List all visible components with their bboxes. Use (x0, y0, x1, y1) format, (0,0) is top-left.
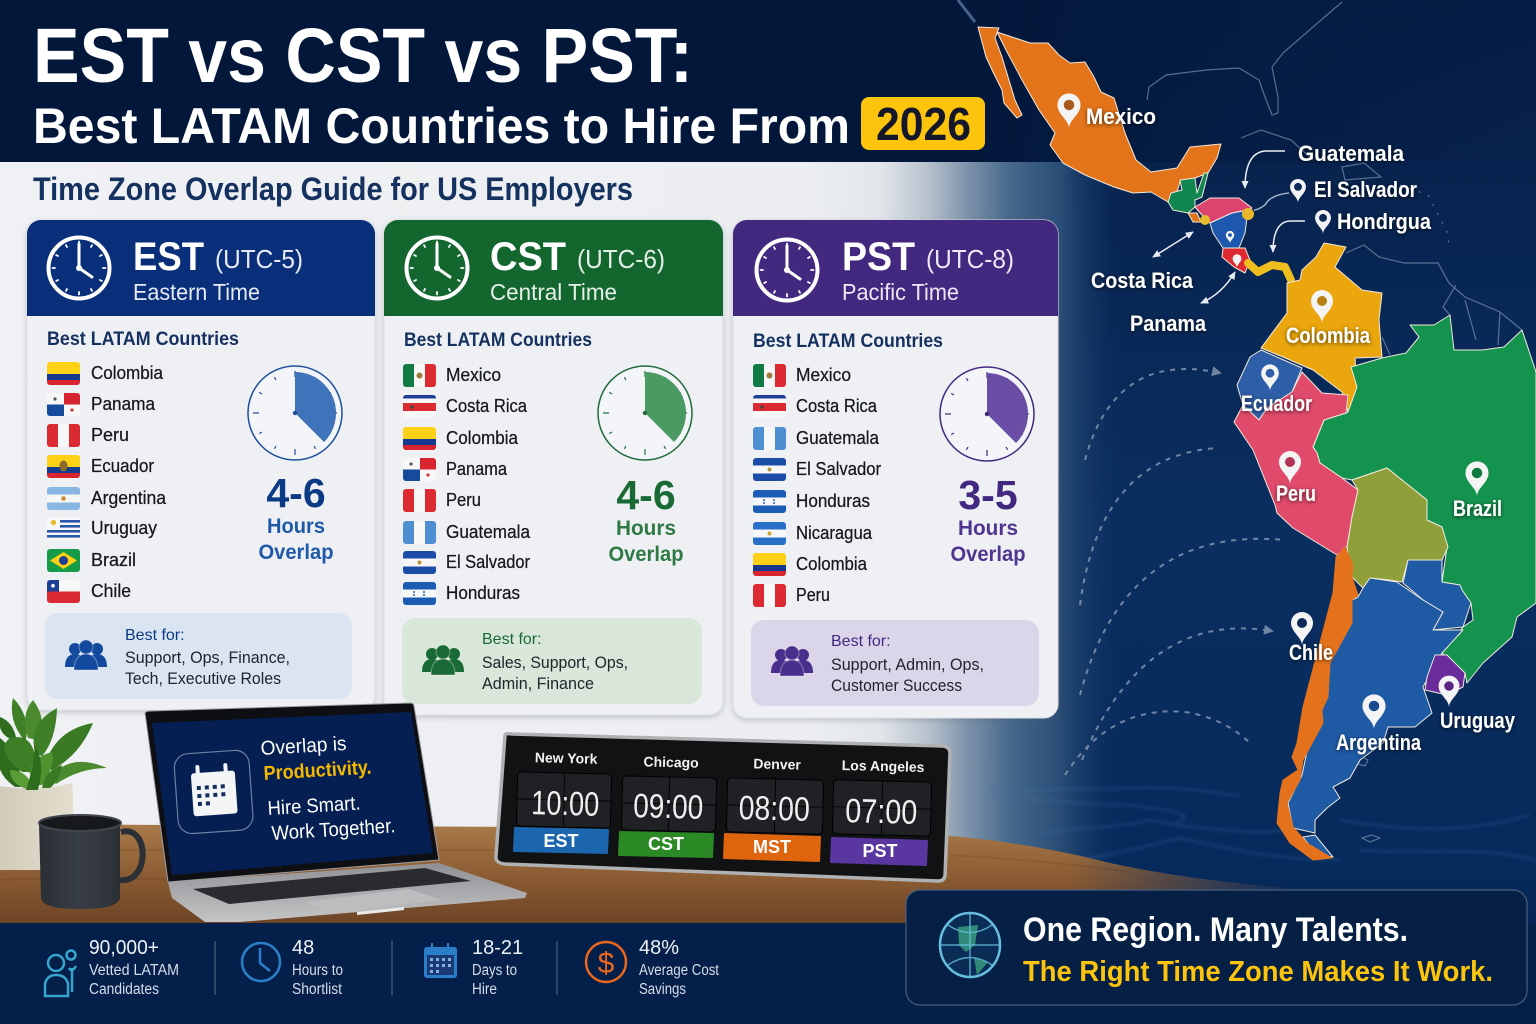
CST countries: Guatemala (446, 522, 531, 542)
EST list heading: Best LATAM Countries (47, 328, 239, 350)
country: Peru (1234, 372, 1358, 555)
PST best for (751, 620, 1039, 706)
stat: savings: Average Cost (639, 962, 720, 979)
EST overlap value (258, 470, 334, 564)
pin: Brazil (1465, 461, 1489, 496)
panel: CST (384, 220, 723, 715)
clock: Chicago: Chicago (643, 753, 699, 771)
CST overlap dial (598, 366, 692, 460)
PST countries: Nicaragua (796, 523, 873, 543)
map labels: Brazil (1453, 496, 1502, 521)
top header band (0, 0, 1536, 162)
stat: days: Hire (472, 981, 497, 998)
country: Nicaragua (1210, 210, 1248, 248)
EST header: (UTC-5) (215, 244, 303, 274)
coastlines (958, 0, 1522, 842)
pin: Nicaragua (1226, 231, 1234, 243)
PST overlap dial (940, 367, 1034, 461)
map labels: Guatemala (1298, 141, 1405, 166)
stat: candidates: Candidates (89, 981, 159, 998)
CST countries: Honduras (446, 583, 520, 603)
EST countries (47, 362, 167, 603)
PST header (733, 220, 1058, 316)
PST overlap value (950, 472, 1026, 566)
icon: calendar (424, 943, 457, 978)
country: El Salvador (1188, 213, 1201, 222)
country: Ecuador (1237, 350, 1302, 420)
dashed arcs (1065, 369, 1285, 775)
CST countries (403, 364, 531, 605)
PST countries: Costa Rica (796, 396, 878, 416)
PST overlap value: 3-5 (958, 472, 1018, 518)
PST countries: Mexico (796, 365, 851, 385)
CST countries: Panama (446, 459, 508, 479)
PST header: PST (842, 235, 915, 279)
map arrows (1153, 151, 1305, 303)
EST countries: Argentina (91, 488, 167, 508)
title: EST vs CST vs PST: (33, 13, 693, 99)
small map details (1200, 208, 1254, 225)
PST countries: Honduras (796, 491, 870, 511)
clock: Denver (724, 755, 824, 861)
map labels: Uruguay (1440, 708, 1516, 733)
clock: Los Angeles (831, 757, 932, 865)
CST countries: Peru (446, 490, 481, 510)
EST header: EST (133, 235, 204, 279)
clock: New York: 10:00 (531, 784, 600, 824)
EST best for (45, 613, 352, 699)
PST best for: Best for: (831, 633, 891, 650)
country: Paraguay (1403, 560, 1471, 630)
pin: El Salvador (1290, 179, 1306, 203)
stat: hours (242, 937, 343, 998)
CST header: CST (490, 235, 566, 279)
EST header (27, 220, 375, 316)
PST best for: Customer Success (831, 677, 962, 695)
pin: Mexico (1057, 93, 1081, 128)
map pins (1057, 93, 1489, 729)
stat: candidates: Vetted LATAM (89, 962, 179, 979)
country: Honduras (1195, 198, 1252, 223)
country: Uruguay (1425, 655, 1465, 695)
screen text: Overlap is (260, 733, 347, 760)
pin: Honduras (1315, 210, 1331, 234)
EST overlap value: Overlap (258, 541, 334, 564)
PST overlap value: Hours (958, 517, 1018, 540)
clock: Los Angeles: PST (862, 841, 898, 861)
CST best for: Admin, Finance (482, 675, 594, 693)
stat: savings: Savings (639, 981, 686, 998)
country: Bolivia (1347, 468, 1448, 588)
CST overlap value (608, 472, 684, 566)
stat: hours: 48 (292, 937, 314, 959)
laptop screen frame (145, 703, 439, 882)
map labels: Colombia (1286, 323, 1371, 348)
CST overlap value: Hours (616, 517, 676, 540)
light panel area (0, 162, 1120, 880)
stat: savings: 48% (639, 937, 679, 959)
EST countries: Peru (91, 425, 129, 445)
map labels: Peru (1276, 481, 1316, 506)
icon: clock (242, 943, 280, 981)
EST countries: Chile (91, 581, 131, 601)
clock: Chicago: CST (648, 834, 684, 854)
clock: New York: New York (535, 749, 598, 767)
EST countries: Panama (91, 394, 156, 414)
world clock device (496, 734, 950, 881)
icon: globe (940, 913, 1000, 977)
stat: days (424, 937, 523, 998)
panel: PST (733, 220, 1058, 718)
EST countries: Brazil (91, 550, 136, 570)
CST header: (UTC-6) (577, 244, 665, 274)
EST header: Eastern Time (133, 279, 260, 305)
EST overlap value: 4-6 (266, 470, 326, 516)
call-out box: The Right Time Zone Makes It Work. (1023, 956, 1493, 988)
clock: New York (514, 749, 612, 853)
map labels: Panama (1130, 311, 1207, 336)
PST countries: El Salvador (796, 459, 881, 479)
CST best for: Best for: (482, 631, 542, 648)
country: Panama (1248, 263, 1291, 280)
map labels: Hondrgua (1337, 209, 1432, 234)
bottom stats bar (0, 923, 1536, 1024)
desk surface (0, 824, 1285, 923)
pin: Peru (1279, 451, 1301, 484)
pin: Ecuador (1261, 364, 1279, 391)
CST header: Central Time (490, 279, 617, 305)
stat: candidates: 90,000+ (89, 937, 159, 959)
pin: Costa Rica (1233, 254, 1241, 267)
CST overlap value: Overlap (608, 543, 684, 566)
CST list heading: Best LATAM Countries (404, 329, 592, 351)
stat: days: 18-21 (472, 937, 523, 959)
map labels (1086, 104, 1516, 755)
EST countries: Colombia (91, 363, 164, 383)
call-out box: One Region. Many Talents. (1023, 911, 1408, 949)
map labels: El Salvador (1314, 177, 1417, 202)
country: Costa Rica (1222, 248, 1250, 273)
CST countries: El Salvador (446, 552, 530, 572)
keyboard (193, 868, 471, 904)
icon: people (45, 950, 76, 996)
laptop screen (152, 712, 433, 875)
leaves (0, 698, 107, 790)
clock: Denver: 08:00 (738, 789, 810, 829)
PST best for: Support, Admin, Ops, (831, 656, 984, 674)
PST countries: Peru (796, 585, 830, 605)
map: Latin America (978, 27, 1536, 860)
map labels: Argentina (1336, 730, 1422, 755)
ocean wave texture (985, 787, 1536, 862)
map labels: Costa Rica (1091, 268, 1194, 293)
EST overlap value: Hours (267, 515, 325, 538)
clock: Denver: MST (753, 837, 791, 857)
country: Brazil (1313, 315, 1536, 683)
PST list heading: Best LATAM Countries (753, 330, 943, 352)
map labels: Chile (1289, 640, 1333, 665)
screen text (260, 733, 396, 845)
CST header (384, 220, 723, 316)
panel: EST (27, 220, 375, 710)
PST countries (753, 364, 881, 607)
plant (0, 698, 107, 870)
EST best for: Tech, Executive Roles (125, 670, 281, 688)
clock: Los Angeles: 07:00 (845, 792, 918, 832)
EST best for: Support, Ops, Finance, (125, 649, 290, 667)
pot (0, 783, 73, 870)
pin: Colombia (1311, 290, 1333, 323)
stat: days: Days to (472, 962, 517, 979)
subtitle: Time Zone Overlap Guide for US Employers (33, 171, 633, 207)
title: Best LATAM Countries to Hire From (33, 98, 850, 154)
EST overlap dial (248, 366, 342, 460)
pin: Argentina (1362, 694, 1386, 729)
screen text: Work Together. (271, 815, 396, 845)
pin: Chile (1291, 612, 1313, 645)
country: Argentina (1288, 578, 1463, 857)
EST countries: Ecuador (91, 456, 154, 476)
stat: hours: Shortlist (292, 981, 343, 998)
CST overlap value: 4-6 (616, 472, 676, 518)
country: Colombia (1261, 243, 1382, 412)
CST countries: Costa Rica (446, 396, 528, 416)
PST overlap value: Overlap (950, 543, 1026, 566)
PST countries: Colombia (796, 554, 868, 574)
stat: candidates (45, 937, 179, 998)
laptop (145, 703, 527, 922)
stat: hours: Hours to (292, 962, 343, 979)
map labels: Ecuador (1241, 391, 1312, 416)
CST countries: Colombia (446, 428, 519, 448)
PST countries: Guatemala (796, 428, 880, 448)
CST best for (402, 618, 702, 704)
EST countries: Uruguay (91, 518, 157, 538)
screen calendar icon (173, 749, 254, 834)
clock: New York: EST (543, 831, 579, 851)
title (33, 13, 850, 154)
icon: dollar: $ (598, 947, 615, 980)
clock: Chicago (619, 753, 717, 857)
CST countries: Mexico (446, 365, 501, 385)
screen text: Hire Smart. (267, 793, 361, 820)
year badge: 2026 (876, 98, 971, 150)
pin: Uruguay (1439, 676, 1459, 707)
EST best for: Best for: (125, 627, 185, 644)
laptop base (168, 863, 527, 922)
stat: savings (586, 937, 720, 998)
CST best for: Sales, Support, Ops, (482, 654, 628, 672)
country: Chile (1277, 547, 1358, 860)
country: Mexico (978, 27, 1221, 202)
clock: Chicago: 09:00 (633, 787, 704, 827)
PST header: (UTC-8) (926, 244, 1014, 274)
clock: Los Angeles: Los Angeles (842, 757, 925, 775)
clock: Denver: Denver (753, 755, 802, 773)
call-out box (906, 890, 1527, 1005)
country: Guatemala (1168, 173, 1208, 213)
map labels: Mexico (1086, 104, 1156, 129)
coffee mug (39, 815, 143, 909)
PST header: Pacific Time (842, 279, 959, 305)
screen text: Productivity. (263, 757, 372, 785)
